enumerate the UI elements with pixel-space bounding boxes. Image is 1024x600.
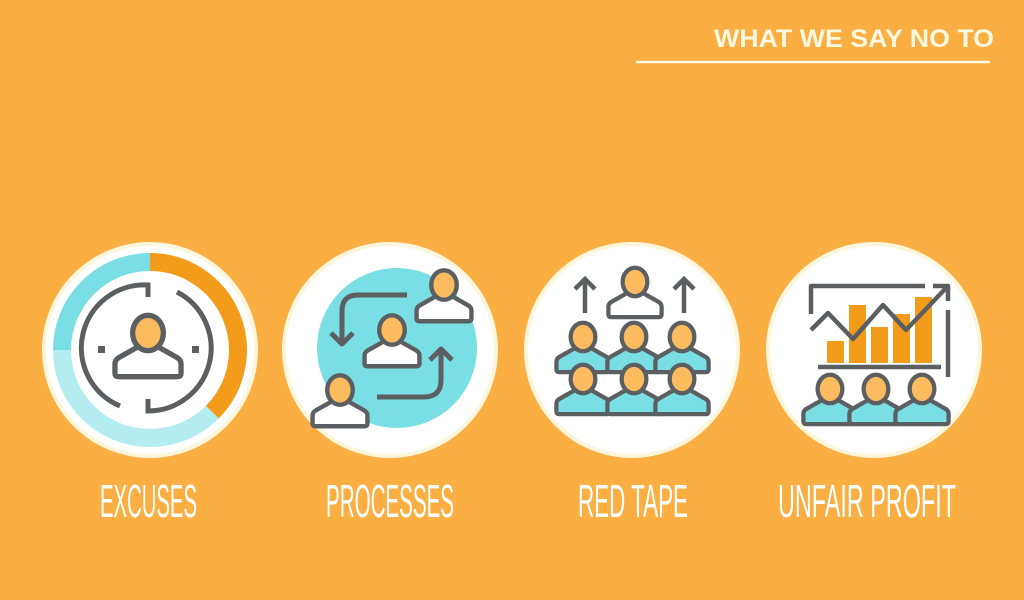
panel: red tape [526, 244, 738, 456]
icon: arrows up [575, 279, 694, 313]
icon: people [313, 270, 471, 426]
panel: processes [284, 244, 496, 456]
title: WHAT WE SAY NO TO [714, 25, 994, 53]
panel: excuses [44, 244, 256, 456]
icon: people [803, 375, 949, 424]
icon: target person [81, 285, 211, 411]
chart: frame and trend line [811, 286, 948, 377]
icon: people hierarchy [556, 268, 709, 414]
text: RED TAPE [578, 475, 688, 527]
text: EXCUSES [100, 475, 197, 527]
chart: donut ring [62, 262, 238, 438]
text: PROCESSES [326, 475, 454, 527]
panel: unfair profit [768, 244, 980, 456]
icon: arrows [331, 295, 452, 397]
chart: bars [827, 297, 932, 363]
